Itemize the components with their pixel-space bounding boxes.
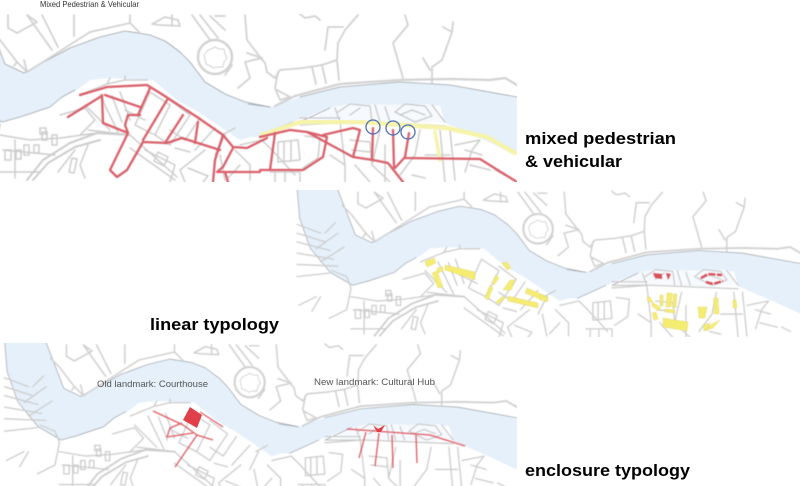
label: enclosure typology: enclosure typology	[525, 461, 691, 480]
red connecting streets	[153, 411, 465, 468]
annotation: old landmark: Old landmark: Courthouse	[97, 379, 208, 390]
yellow linear building blocks	[425, 258, 737, 331]
panel: linear typology map	[297, 188, 800, 338]
label: linear typology: linear typology	[150, 315, 280, 334]
red enclosure arcs	[653, 273, 723, 284]
base map: river and road network	[5, 340, 517, 486]
base map: river and road network	[297, 188, 800, 338]
yellow waterfront promenade	[262, 122, 515, 160]
base map: river and road network	[0, 10, 517, 182]
blue circles: crossing nodes	[366, 120, 415, 139]
label: mixed pedestrian and vehicular	[525, 129, 676, 171]
icon: new landmark cultural hub	[373, 425, 385, 432]
red vehicular and pedestrian street network	[68, 85, 517, 182]
label: mixed pedestrian and vehicular: mixed pedestrian	[525, 129, 676, 148]
annotation: new landmark: New landmark: Cultural Hub	[314, 377, 435, 388]
label: mixed pedestrian and vehicular: & vehicular	[525, 152, 622, 171]
panel: mixed pedestrian and vehicular map	[0, 10, 517, 182]
panel: enclosure typology map	[5, 340, 517, 486]
icon: old landmark courthouse block	[183, 407, 202, 428]
